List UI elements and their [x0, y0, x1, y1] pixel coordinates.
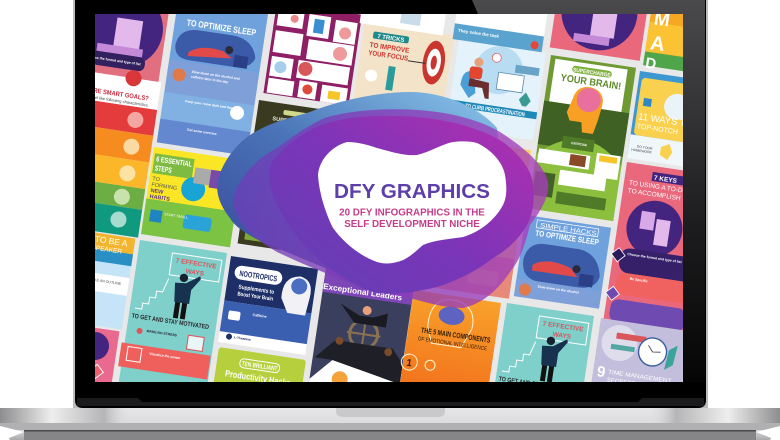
tile: simple hacks to optimize sleep: Slow down on the alcohol — [537, 285, 579, 295]
tile: superfoods dark — [238, 100, 319, 250]
tile: 9 time management secrets — [592, 318, 683, 382]
tile: simple hacks to optimize sleep: SIMPLE HACKS — [540, 222, 598, 238]
tile: 11 ways top-notch: HOMEWORK — [631, 148, 653, 155]
blob: dark purple main layer — [269, 116, 534, 294]
tile: choose the format, top left: Choose the format and type of list — [86, 54, 142, 67]
tile: 7 effective ways, left: 7 EFFECTIVE — [175, 258, 218, 271]
tile: middle hidden pink — [434, 147, 531, 299]
tile: ten brilliant productivity hacks: Productivity Hacks — [224, 368, 291, 388]
tile: 11 ways top-notch: 11 WAYS TO — [637, 111, 693, 130]
tile: purple and pink, lower left — [95, 328, 120, 382]
tile: 7 tricks to improve your focus: 7 TRICKS — [377, 34, 405, 44]
tile: MAD goals: D — [644, 55, 658, 73]
tile: curb procrastination: TO CURB PROCRASTINATION — [465, 104, 525, 118]
tile: simple hacks to optimize sleep — [514, 215, 611, 309]
tile: 9 time management secrets: SECRETS — [606, 378, 635, 388]
tile: supercharge your brain — [528, 55, 636, 221]
blob: blue back layer — [217, 92, 500, 270]
tile: 7 tricks to improve your focus: TO IMPROVE — [369, 42, 410, 55]
tile: 7 keys to using a to-do list: TO USING A TO-DO — [628, 180, 688, 195]
subheading: line one: 20 DFY INFOGRAPHICS IN THE — [339, 208, 485, 218]
tile: 7 keys to using a to-do list: Be Specific — [629, 277, 648, 283]
tile: supercharge your brain: EXERCISE — [571, 141, 587, 147]
tile: 6 essential steps — [141, 147, 243, 247]
tile: to be a speaker: SPEAKER — [91, 244, 123, 256]
tile: nootropics: Caffeine — [252, 313, 267, 319]
tile: top centre white and blue — [360, 14, 446, 36]
tile: to optimize sleep, left: TO OPTIMIZE SLEEP — [186, 18, 257, 38]
blob: white centre — [318, 141, 506, 264]
tile: 7 tricks to improve your focus: PRIORITIZE YOUR — [357, 101, 389, 109]
tile: supercharge your brain: YOUR BRAIN! — [560, 73, 622, 93]
tile: 7 effective ways, right: 7 EFFECTIVE — [542, 321, 585, 334]
tile: 9 time management secrets: TIME MANAGEMENT — [608, 370, 672, 385]
tile: 11 ways top-notch — [627, 71, 683, 166]
tile: nootropics: NOOTROPICS — [239, 269, 278, 284]
tile: supercharge your brain: SUPERCHARGE — [573, 67, 611, 79]
tile: smart goals: ARE SMART GOALS? — [89, 87, 149, 103]
tile: nootropics: L-Theanine — [234, 335, 251, 342]
tile: 5 main components of emotional intelligence: THE 5 MAIN COMPONENTS — [421, 326, 491, 345]
tile: ten brilliant productivity hacks: TEN BRILLIANT — [241, 361, 278, 373]
tile: MAD goals: A — [649, 32, 666, 56]
laptop base — [0, 408, 780, 440]
tile: 7 keys to using a to-do list: Choose the format and type of list — [627, 252, 683, 264]
tile: 7 tricks to improve your focus — [354, 24, 454, 99]
tile: 7 keys to using a to-do list — [604, 162, 683, 330]
tile: exceptional leaders: Exceptional Leaders — [323, 282, 403, 303]
tile: 7 effective ways, right: TO GET AND STAY MOTIVATED — [498, 376, 577, 394]
tile: to optimize sleep, left: Keep your room dark and the — [185, 99, 232, 110]
tile: maroon brain facts — [263, 14, 361, 104]
laptop lid bezel — [73, 0, 708, 408]
tile: superfoods dark: SUPERFOODS — [272, 116, 312, 128]
tile: to be a speaker: TO BE A — [94, 234, 129, 248]
tile: top right text tile — [452, 14, 548, 52]
tile: 5 main components of emotional intelligence: OF EMOTIONAL INTELLIGENCE — [417, 336, 488, 352]
tile: MAD goals — [643, 14, 683, 72]
tile: 6 essential steps: FORMING — [151, 182, 177, 192]
tile: 6 essential steps: NEW — [150, 188, 164, 196]
tile: 6 essential steps: HABITS — [149, 194, 171, 203]
tile: 7 keys to using a to-do list: 7 KEYS — [653, 175, 678, 185]
tile: 7 effective ways, left: Visualize the power — [149, 352, 181, 360]
subheading: line two: SELF DEVELOPMENT NICHE — [344, 219, 480, 230]
tile: 7 effective ways, right: WAYS — [552, 331, 572, 341]
blob: translucent purple layer — [233, 109, 548, 308]
tile: 7 effective ways, left: TO GET AND STAY MOTIVATED — [131, 313, 210, 331]
tile: nootropics — [218, 256, 318, 355]
tile: simple hacks to optimize sleep: TO OPTIMIZE SLEEP — [535, 229, 600, 247]
tile: 6 essential steps: START SMALL — [164, 212, 188, 220]
tile: to optimize sleep, left: Get some exercise — [187, 128, 217, 136]
tile: 7 effective ways, left — [118, 240, 227, 382]
tile: to optimize sleep, left — [156, 14, 268, 154]
tile: 5 main components of emotional intelligence — [400, 291, 501, 382]
tile: 6 essential steps: STEPS — [154, 163, 172, 175]
tile: 7 effective ways, left: WAYS — [185, 268, 205, 278]
tile: smart goals — [95, 70, 161, 238]
tile: to optimize sleep, left: Slow down on the alcohol and — [191, 70, 240, 81]
tile: smart goals: a feel like following characteristics — [88, 94, 148, 108]
central blob badge — [217, 92, 548, 308]
tile: 7 effective ways, left: MAKE NO STRESS — [146, 329, 178, 338]
tile: top right purple and pink — [550, 14, 647, 61]
screen collage — [95, 14, 683, 382]
tile: nootropics: Supplements to — [238, 284, 275, 296]
tile: to optimize sleep, left: caffeine later in the day — [191, 75, 229, 84]
tile: top right text tile: They solve the task — [458, 28, 500, 39]
tile: 7 keys to using a to-do list: TO ACCOMPLISH — [627, 187, 681, 202]
tile: 6 essential steps: TO — [152, 176, 161, 183]
heading: DFY Graphics: DFY GRAPHICS — [334, 180, 490, 203]
tile: curb procrastination — [446, 40, 546, 140]
tile: nootropics: Boost Your Brain — [237, 291, 274, 303]
tile: 7 tricks to improve your focus: YOUR FOCUS — [368, 50, 409, 63]
tile: 7 effective ways, right — [495, 303, 594, 382]
tile: to be a speaker: MAKE AN OUTLINE — [89, 277, 122, 286]
tile: 9 time management secrets: 9 — [596, 363, 607, 381]
tile: choose the format, top left — [95, 14, 169, 82]
tile: 11 ways top-notch: DO YOUR — [637, 144, 653, 151]
tile: ten brilliant productivity hacks — [214, 347, 306, 382]
tile: 6 essential steps: 6 ESSENTIAL — [156, 155, 193, 169]
tile: 11 ways top-notch: TOP-NOTCH — [636, 123, 678, 136]
tile: 5 main components of emotional intelligence: 1 — [406, 358, 413, 369]
tile: MAD goals: M — [652, 8, 671, 32]
tile: exceptional leaders — [309, 268, 414, 382]
tile: to be a speaker — [95, 232, 136, 330]
